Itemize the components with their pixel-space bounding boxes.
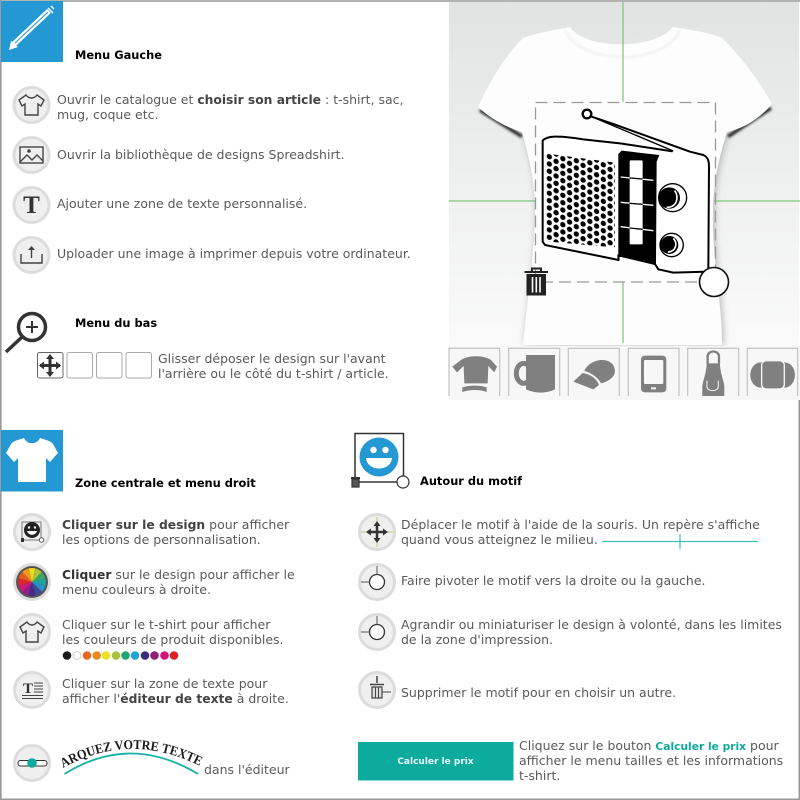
button: Calculer le prix: Calculer le prix <box>397 757 474 767</box>
row: catalogue <box>14 88 404 122</box>
heading: Zone centrale et menu droit: Zone centrale et menu droit <box>75 476 256 490</box>
row: couleurs produit: Cliquer sur le t-shirt pour afficher <box>62 617 271 632</box>
row: supprimer <box>360 672 676 708</box>
text: calculer le prix: afficher le menu tailles et les informations <box>519 753 783 768</box>
heading: Menu Gauche: Menu Gauche <box>75 48 162 62</box>
row: arquez votre texte: ARQUEZ VOTRE TEXTE <box>62 740 203 768</box>
row: agrandir: de la zone d'impression. <box>401 632 553 647</box>
icon: magnifier <box>6 314 46 352</box>
row: cliquer sur le design: les options de personnalisation. <box>62 532 261 547</box>
center guide lines <box>449 2 800 343</box>
row: déplacer: Déplacer le motif à l'aide de la souris. Un repère s'affiche <box>401 517 760 532</box>
row: texte: Ajouter une zone de texte personnalisé. <box>57 196 307 211</box>
text: calculer le prix: Cliquez sur le bouton Calculer le prix pour <box>519 738 780 753</box>
row: déplacer: quand vous atteignez le milieu. <box>401 532 598 547</box>
row: éditeur de texte: T <box>23 681 33 697</box>
row: supprimer: Supprimer le motif pour en choisir un autre. <box>401 685 676 700</box>
icon: mug <box>516 355 555 393</box>
row: bibliothèque: Ouvrir la bibliothèque de designs Spreadshirt. <box>57 147 344 162</box>
panel: t-shirt designer preview <box>449 2 800 346</box>
row: catalogue: mug, coque etc. <box>57 107 158 122</box>
icon: apron <box>702 351 724 396</box>
row: éditeur de texte: afficher l'éditeur de texte à droite. <box>62 691 289 706</box>
row: upload: Uploader une image à imprimer depuis votre ordinateur. <box>57 246 411 261</box>
row: arquez votre texte <box>13 740 291 782</box>
row: cliquer sur le design <box>14 514 290 550</box>
row: couleurs produit <box>14 614 284 660</box>
t-shirt <box>478 27 772 345</box>
section icon: smiley design frame <box>351 434 409 488</box>
heading: Menu du bas: Menu du bas <box>75 316 157 330</box>
row: texte: T <box>23 192 40 219</box>
icon: bag <box>750 361 795 389</box>
text: calculer le prix <box>519 738 783 783</box>
row: agrandir <box>360 614 782 650</box>
heading: Autour du motif: Autour du motif <box>420 474 523 488</box>
section icon: pencil <box>1 1 63 62</box>
row: éditeur de texte <box>14 672 289 708</box>
move boxes <box>38 352 152 378</box>
section icon: t-shirt <box>1 430 63 492</box>
row: arquez votre texte: dans l'éditeur <box>204 762 291 777</box>
row: agrandir: Agrandir ou miniaturiser le design à volonté, dans les limites <box>401 617 782 632</box>
row: couleurs produit: les couleurs de produit disponibles. <box>62 632 284 647</box>
colour swatches <box>63 651 178 660</box>
text: glisser déposer <box>158 351 389 381</box>
icon: tee <box>452 356 497 392</box>
row: upload <box>14 238 411 272</box>
row: pivoter <box>360 564 706 600</box>
row: roue de couleurs: menu couleurs à droite. <box>62 582 211 597</box>
row: catalogue: Ouvrir le catalogue et choisir son article : t-shirt, sac, <box>57 92 404 107</box>
row: pivoter: Faire pivoter le motif vers la droite ou la gauche. <box>401 573 706 588</box>
icon: cap <box>573 360 615 389</box>
row: déplacer <box>360 514 760 550</box>
handle circle <box>700 268 728 296</box>
row: roue de couleurs <box>14 564 295 600</box>
icon: phone <box>641 356 666 392</box>
text: glisser déposer: Glisser déposer le design sur l'avant <box>158 351 386 366</box>
panel: product thumbnails <box>449 346 800 400</box>
button: Calculer le prix <box>358 742 514 780</box>
row: texte <box>14 188 307 222</box>
row: bibliothèque <box>14 138 344 172</box>
teal guide <box>602 534 758 549</box>
row: roue de couleurs: Cliquer sur le design pour afficher le <box>62 567 295 582</box>
teal arc <box>64 754 198 774</box>
radio design <box>543 110 709 273</box>
icon: trash <box>524 268 548 294</box>
dashed print zone <box>536 102 716 282</box>
row: cliquer sur le design: Cliquer sur le design pour afficher <box>62 517 290 532</box>
text: calculer le prix: t-shirt. <box>519 768 560 783</box>
row: éditeur de texte: Cliquer sur la zone de texte pour <box>62 676 268 691</box>
text: glisser déposer: l'arrière ou le côté du t-shirt / article. <box>158 366 389 381</box>
